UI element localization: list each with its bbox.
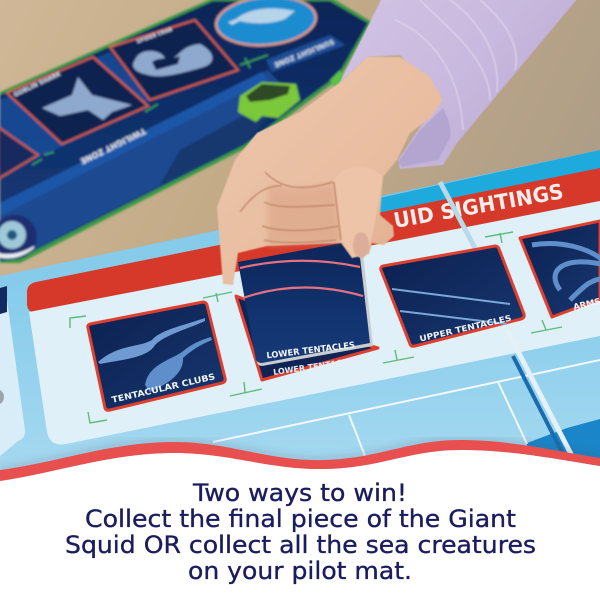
card: tentacular clubs [88, 302, 225, 410]
zone label: twilight zone: TWILIGHT ZONE [79, 126, 147, 166]
red heading band [27, 168, 600, 312]
game board: dark pilot mat in the background [0, 0, 372, 263]
shaded palm under the fingers [268, 182, 340, 246]
caption text: Squid OR collect all the sea creatures [65, 531, 536, 559]
thumb [334, 166, 383, 258]
card: spider crab [110, 20, 238, 100]
photo: table background [0, 0, 600, 470]
card: goblin shark [7, 57, 148, 144]
caption text [65, 479, 536, 585]
board fold [440, 182, 572, 456]
game board: light blue squid sightings mat [0, 150, 600, 480]
card: goblin shark: GOBLIN SHARK [13, 71, 62, 99]
zone label: sunlight zone [266, 35, 345, 72]
cyan top strip [370, 150, 600, 218]
white caption background [0, 450, 600, 600]
curled finger creases [240, 172, 341, 243]
thumbnail [353, 232, 369, 258]
green card corner marks [70, 232, 562, 423]
card: partial card at left edge [0, 127, 38, 179]
pale card panel [29, 201, 600, 444]
left pale top strip [0, 220, 270, 290]
sleeve: lavender sweater [339, 0, 578, 169]
token: green submarine [238, 70, 345, 122]
dark patch bottom right [527, 419, 600, 470]
wave shadow [0, 440, 600, 470]
card: upper tentacles: UPPER TENTACLES [418, 313, 512, 344]
caption text: on your pilot mat. [188, 557, 412, 585]
green card corner marks on the mat [32, 55, 268, 165]
token: wheel coin [0, 215, 37, 259]
card: lower tentacles held in hand: LOWER TENTACLES [266, 341, 356, 361]
caption text: Two ways to win! [192, 479, 407, 507]
card: tentacular clubs: TENTACULAR CLUBS [111, 372, 216, 406]
sunfish porthole [214, 0, 318, 49]
heading: squid sightings: UID SIGHTINGS [392, 179, 565, 233]
partial card and marker on the left panel [0, 286, 7, 405]
red wave border [0, 440, 600, 481]
card: lower tentacles held in hand [238, 240, 373, 366]
blue zone band with starry water [0, 70, 290, 260]
card: spider crab: SPIDER CRAB [136, 27, 173, 45]
caption text: Collect the final piece of the Giant [85, 505, 516, 533]
left pale panel [0, 300, 25, 456]
hand holding the card [217, 57, 443, 285]
card: lower tentacles slot [236, 296, 378, 380]
card: arms [520, 221, 600, 317]
card: lower tentacles slot: LOWER TENTACLES [273, 356, 359, 377]
zone label: sunlight zone: SUNLIGHT ZONE [273, 37, 335, 69]
card: upper tentacles [381, 246, 524, 346]
white grid lines [213, 360, 600, 456]
